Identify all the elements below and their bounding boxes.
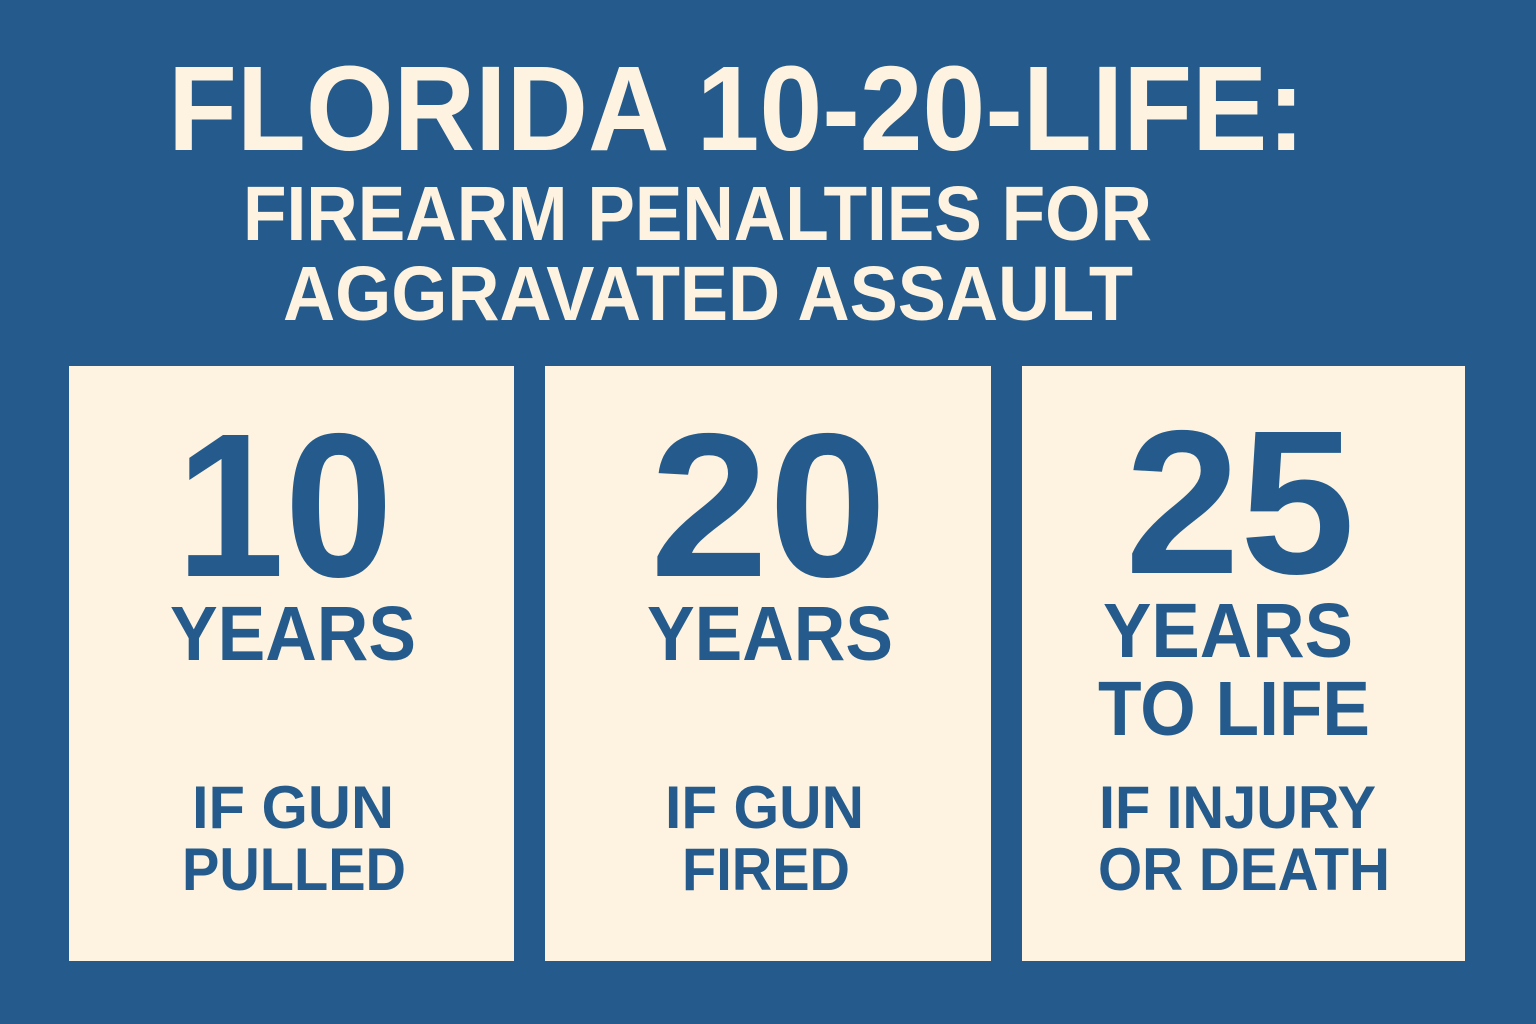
label years to life bbox=[1098, 588, 1370, 752]
panel: 25 years to life bbox=[1022, 366, 1465, 961]
label years to life: YEARS bbox=[1103, 588, 1353, 674]
condition: gun fired: IF GUN bbox=[665, 774, 864, 841]
title bbox=[168, 40, 1305, 337]
subtitle: FIREARM PENALTIES FOR bbox=[243, 171, 1152, 257]
condition: gun pulled bbox=[182, 774, 406, 903]
label years: YEARS bbox=[647, 591, 893, 677]
panel: 10 years bbox=[69, 366, 514, 961]
label years to life: TO LIFE bbox=[1098, 666, 1370, 752]
number 10: 10 bbox=[176, 391, 393, 620]
subtitle: AGGRAVATED ASSAULT bbox=[283, 251, 1133, 337]
title: FLORIDA 10-20-LIFE: bbox=[168, 40, 1305, 176]
number 25: 25 bbox=[1125, 388, 1355, 617]
condition: gun fired bbox=[665, 774, 864, 903]
condition: gun fired: FIRED bbox=[682, 836, 850, 903]
condition: injury or death: OR DEATH bbox=[1098, 836, 1390, 903]
condition: gun pulled: PULLED bbox=[182, 836, 406, 903]
number 20: 20 bbox=[650, 391, 887, 620]
label years: YEARS bbox=[170, 591, 416, 677]
condition: injury or death bbox=[1098, 774, 1390, 903]
condition: gun pulled: IF GUN bbox=[192, 774, 394, 841]
subtitle bbox=[243, 171, 1152, 337]
condition: injury or death: IF INJURY bbox=[1099, 774, 1376, 841]
panel: 20 years bbox=[545, 366, 991, 961]
